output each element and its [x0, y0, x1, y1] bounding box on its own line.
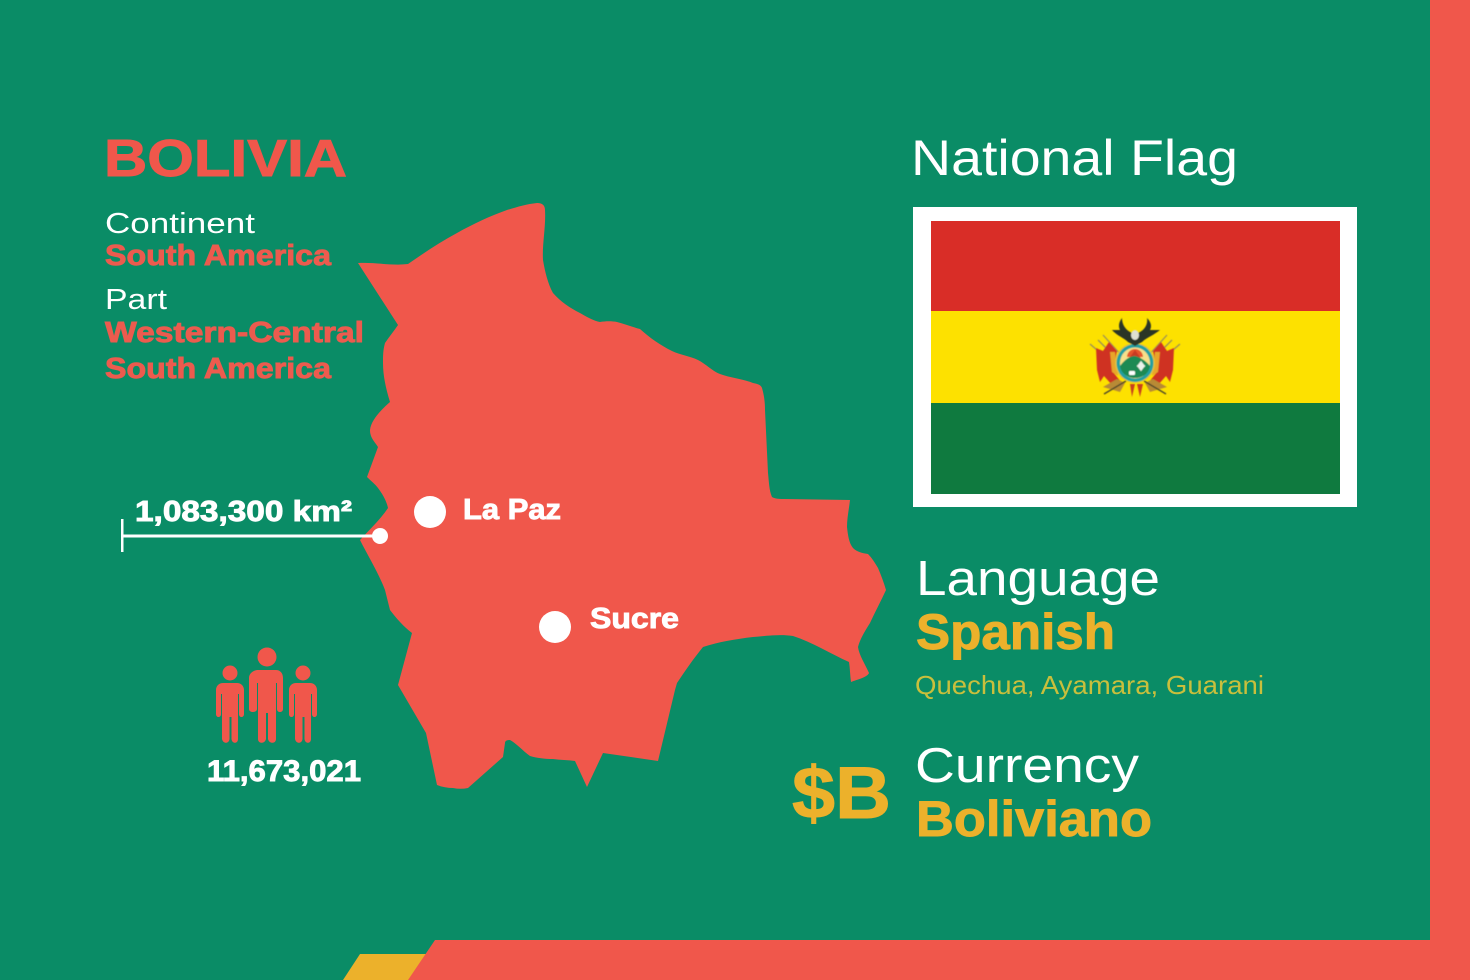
text block: continent	[105, 208, 332, 272]
map of Bolivia	[358, 203, 886, 789]
text block: part: Western-Central	[105, 317, 364, 349]
currency block	[915, 739, 1152, 847]
city marker: Sucre	[539, 603, 679, 643]
heading: national flag: National Flag	[911, 130, 1238, 186]
language block: Quechua, Ayamara, Guarani	[915, 670, 1264, 700]
currency block: Boliviano	[916, 791, 1152, 847]
city marker: La Paz: La Paz	[463, 494, 561, 526]
accent: gold bottom stripe	[343, 954, 440, 980]
city marker: La Paz	[414, 494, 561, 528]
city marker: Sucre: Sucre	[590, 603, 679, 635]
language block	[915, 552, 1264, 700]
language block: Spanish	[916, 604, 1115, 660]
area measure	[121, 496, 388, 552]
icon: coat of arms	[1090, 318, 1180, 397]
text block: part	[105, 284, 364, 385]
text block: continent: South America	[105, 240, 332, 272]
title: BOLIVIA	[104, 130, 347, 188]
text block: continent: Continent	[105, 208, 255, 240]
accent: red frame right and bottom	[408, 0, 1470, 980]
icon: population people	[216, 648, 317, 743]
text block: part: South America	[105, 353, 332, 385]
icon: currency symbol: $B	[792, 753, 891, 834]
language block: Language	[916, 552, 1160, 606]
text block: part: Part	[105, 284, 167, 316]
population figure: 11,673,021	[207, 755, 361, 788]
national flag	[913, 207, 1357, 507]
currency block: Currency	[915, 739, 1140, 793]
area measure: 1,083,300 km²	[135, 496, 352, 528]
